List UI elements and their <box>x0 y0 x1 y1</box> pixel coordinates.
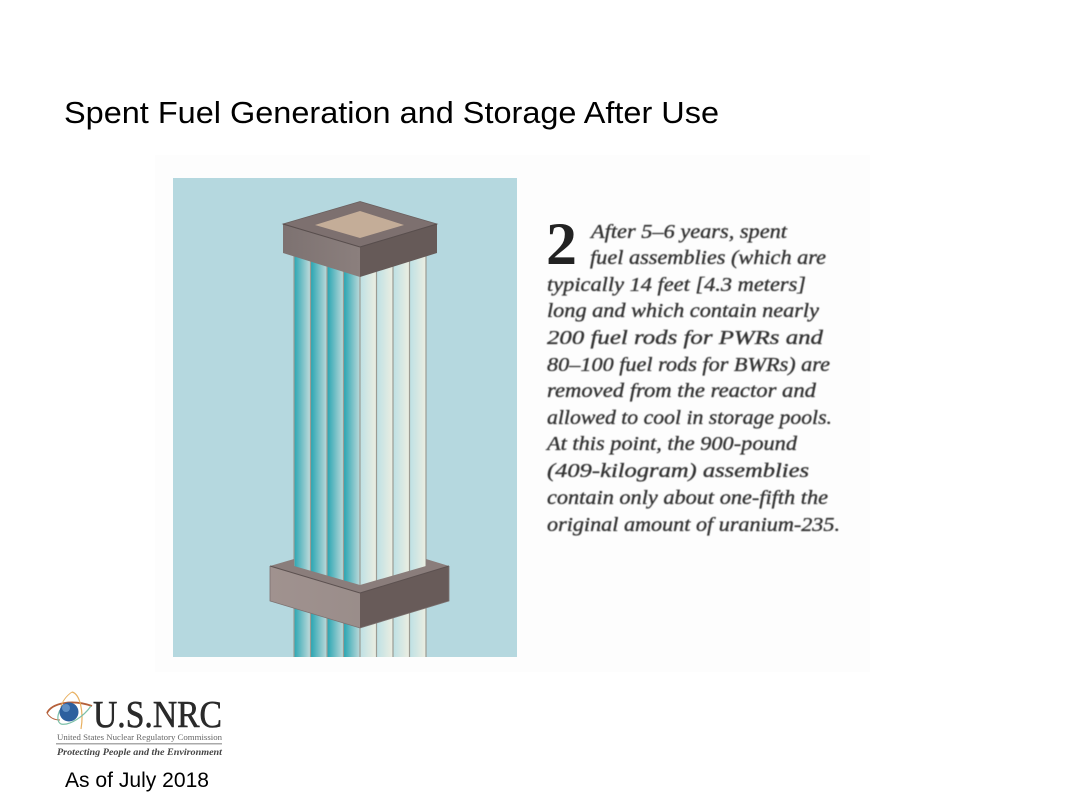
date note: As of July 2018 <box>65 769 209 792</box>
bottom nozzle <box>270 559 449 628</box>
text block: step description <box>545 221 840 536</box>
water background <box>173 178 517 657</box>
text block: step description: (409-kilogram) assemblies <box>547 460 809 482</box>
logo tagline: Protecting People and the Environment <box>57 747 223 757</box>
text block: step description: original amount of uranium-235. <box>547 514 840 536</box>
text block: step description: After 5–6 years, spent <box>589 221 788 243</box>
text block: step description: fuel assemblies (which are <box>590 247 826 269</box>
icon: atom globe <box>47 692 92 729</box>
text block: step description: At this point, the 900-pound <box>545 433 798 455</box>
logo: U.S. NRC <box>47 692 223 757</box>
title: Spent Fuel Generation and Storage After Use <box>64 95 719 130</box>
text block: step description: typically 14 feet [4.3 meters] <box>547 274 806 296</box>
step number: 2 <box>546 211 577 277</box>
logo wordmark: U.S.NRC <box>93 694 222 736</box>
text block: step description: 80–100 fuel rods for BWRs) are <box>547 354 830 376</box>
top nozzle <box>283 202 437 277</box>
fuel rods <box>294 240 426 657</box>
panel: fuel assembly illustration <box>173 178 517 657</box>
text block: step description: 200 fuel rods for PWRs and <box>547 327 824 349</box>
text block: step description: contain only about one-fifth the <box>547 487 828 509</box>
text block: step description: long and which contain nearly <box>547 300 820 322</box>
text block: step description: allowed to cool in storage pools. <box>547 407 832 429</box>
panel: source image background <box>155 155 870 672</box>
logo subtitle: United States Nuclear Regulatory Commission <box>57 732 223 742</box>
text block: step description: removed from the reactor and <box>547 380 817 402</box>
